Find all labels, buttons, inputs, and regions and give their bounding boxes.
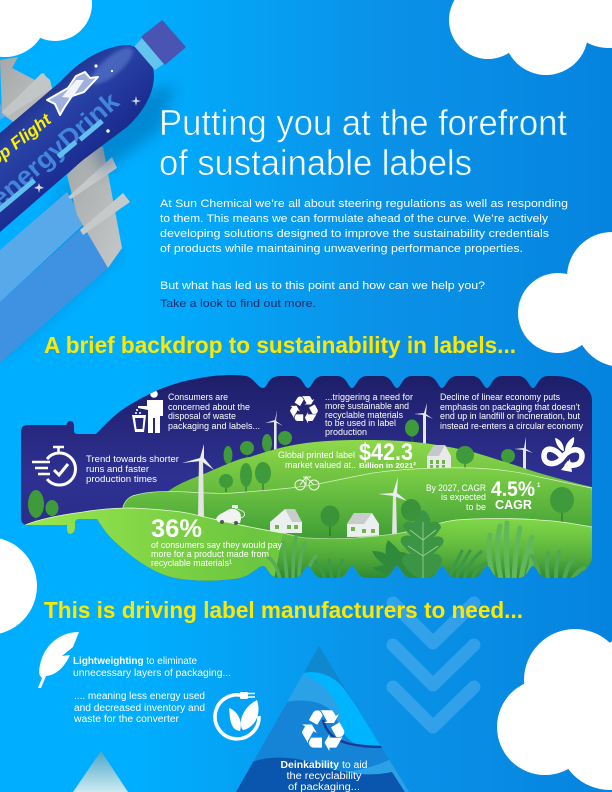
text: shorter runs: production times [86, 474, 157, 485]
intro paragraph: to them. This means we can formulate ahead of the curve. We’re actively [160, 213, 548, 225]
text: deinkability [280, 760, 368, 792]
text: triggering a need: recyclable materials [325, 410, 403, 420]
text: triggering a need: production [325, 427, 367, 437]
text: CAGR forecast [426, 478, 541, 512]
icon: person using bin [132, 390, 163, 433]
cloud: bottom right [497, 629, 612, 790]
bicycle [295, 477, 319, 490]
text: consumers concerned [168, 392, 260, 431]
intro paragraph: At Sun Chemical we’re all about steering regulations as well as responding [160, 198, 568, 210]
icon: feather [38, 632, 79, 688]
text: deinkability: the recyclability [286, 771, 362, 782]
text: decline of linear economy: emphasis on packaging that doesn’t [440, 402, 580, 412]
text: shorter runs [86, 454, 180, 485]
text: lightweighting: unnecessary layers of packaging... [73, 668, 231, 679]
icon: plug and leaves [215, 692, 259, 739]
wind turbine [265, 410, 283, 450]
text: less energy: .... meaning less energy used [74, 691, 205, 702]
title [159, 102, 567, 183]
house: left [270, 509, 302, 533]
title: Putting you at the forefront [159, 102, 567, 143]
trees on middle of back hill [219, 446, 474, 492]
tuft: centre [448, 551, 488, 580]
back hill [154, 440, 592, 581]
front hill [24, 508, 592, 581]
text: shorter runs: runs and faster [86, 464, 150, 475]
text: CAGR forecast: 4.5% [491, 478, 535, 501]
text: consumers concerned: concerned about the [168, 402, 250, 412]
panel: deinkability triangle [200, 640, 420, 792]
title: of sustainable labels [159, 142, 472, 183]
electric car [216, 505, 245, 525]
text: decline of linear economy: end up in landfill or incineration, but [440, 411, 580, 421]
text: decline of linear economy: Decline of linear economy puts [440, 392, 560, 402]
grass tufts [268, 523, 584, 580]
text: CAGR forecast: 1 [537, 483, 541, 489]
text: market value: Billion in 2021² [359, 461, 416, 470]
middle hill [122, 467, 592, 581]
icon: stopwatch [32, 447, 75, 485]
cloud: left middle [0, 537, 37, 635]
text: less energy: and decreased inventory and [74, 703, 205, 714]
text: 36 percent stat: recyclable materials¹ [151, 558, 232, 568]
decorative chevrons [393, 603, 474, 727]
house: centre [347, 513, 379, 537]
panel: bottle-shaped landscape [21, 375, 592, 581]
wind turbine [514, 437, 533, 469]
heading: brief backdrop: A brief backdrop to sustainability in labels... [44, 332, 516, 358]
bottle stars [34, 64, 141, 193]
large tree on right [550, 487, 574, 522]
text: market value: market valued at.. [285, 460, 356, 470]
cloud: right middle [518, 232, 612, 367]
wind turbine [414, 403, 433, 444]
intro paragraph [160, 198, 568, 255]
call to action text: Take a look to find out more. [160, 298, 316, 310]
text: deinkability: Deinkability to aid [280, 760, 368, 771]
cloud: top left [0, 0, 92, 57]
wind turbine: large left [182, 444, 214, 518]
trees on back hill [224, 420, 515, 464]
icon: recycling symbol: ♻ [287, 388, 321, 432]
bottle plane logo [47, 72, 98, 115]
cloud: top right [449, 0, 612, 75]
text: CAGR forecast: to be [466, 502, 486, 512]
text: 36 percent stat: of consumers say they would pay [151, 540, 282, 550]
text: CAGR forecast: By 2027, CAGR [426, 483, 486, 493]
text: 36 percent stat: more for a product made from [151, 549, 269, 559]
text: CAGR forecast: CAGR [495, 497, 533, 512]
heading: driving manufacturers: This is driving label manufacturers to need... [44, 597, 523, 623]
tree in mid valley [320, 506, 340, 536]
text: market value: Global printed label [278, 450, 355, 460]
text: less energy [73, 691, 205, 725]
oak leaf: small [372, 540, 412, 578]
text: lightweighting [73, 656, 231, 679]
tree behind oak [401, 499, 421, 521]
text: decline of linear economy [440, 392, 583, 431]
text: shorter runs: Trend towards shorter [86, 454, 180, 465]
text: triggering a need: to be used in label [325, 418, 396, 428]
text: market value: $42.3 [359, 439, 413, 466]
text: 36 percent stat: 36% [151, 515, 202, 543]
illustration: paper plane [0, 57, 130, 363]
icon: circular economy [544, 437, 582, 472]
bottle pills [0, 119, 104, 214]
text: consumers concerned: disposal of waste [168, 411, 236, 421]
text: 36 percent stat [151, 515, 282, 568]
tuft: far right [532, 552, 584, 580]
text: triggering a need [325, 392, 413, 437]
text: consumers concerned: packaging and labels... [168, 421, 260, 431]
house: top hill [427, 445, 451, 469]
tuft: left [268, 537, 316, 580]
intro paragraph: developing solutions designed to improve the sustainability credentials [160, 228, 549, 240]
text: less energy: waste for the converter [73, 714, 180, 725]
text: triggering a need: more sustainable and [325, 401, 409, 411]
text: decline of linear economy: instead re-enters a circular economy [440, 421, 583, 431]
tuft: centre left [315, 560, 353, 580]
tuft: tall right [489, 523, 532, 580]
wind turbine: centre [378, 477, 407, 537]
text: lightweighting: Lightweighting to eliminate [73, 656, 197, 667]
icon: recycling symbol: ♻ [297, 697, 349, 765]
trees on left [28, 490, 58, 522]
text: CAGR forecast: is expected [441, 492, 486, 502]
text: market value [278, 439, 416, 470]
oak leaf: large [401, 510, 444, 578]
intro paragraph: of products while maintaining unwavering performance properties. [160, 243, 523, 255]
text: triggering a need: ...triggering a need for [325, 392, 413, 402]
illustration: energy drink bottle [0, 22, 184, 232]
text: consumers concerned: Consumers are [168, 392, 228, 402]
question text: But what has led us to this point and how can we help you? [160, 280, 485, 292]
small triangle [73, 751, 128, 792]
